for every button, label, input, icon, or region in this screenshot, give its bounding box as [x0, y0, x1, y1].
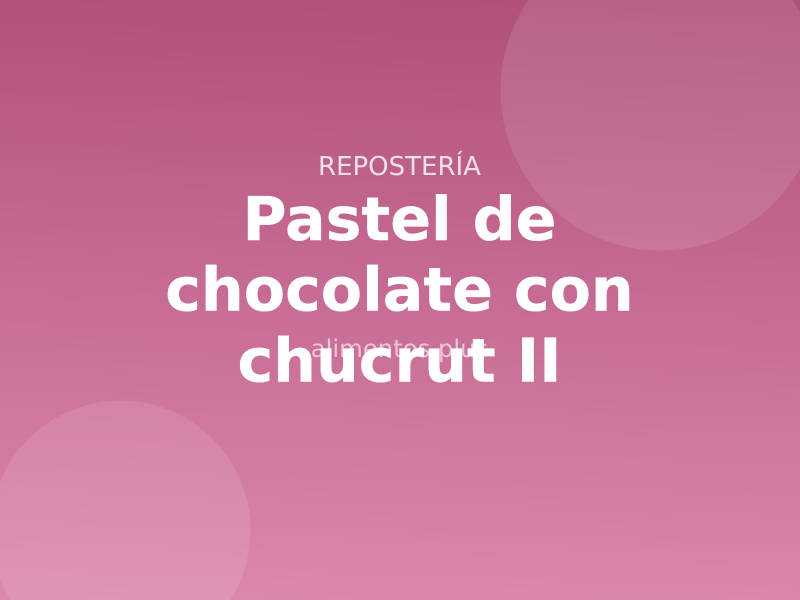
title: chucrut II	[237, 326, 562, 396]
decorative circle: bottom left	[0, 400, 250, 600]
category label: REPOSTERÍA	[318, 150, 481, 182]
title: Pastel de	[242, 185, 557, 255]
title: chocolate con	[165, 256, 634, 326]
title	[165, 185, 634, 396]
source label: alimentos.plus	[311, 334, 488, 363]
decorative circle: top right	[500, 0, 800, 250]
